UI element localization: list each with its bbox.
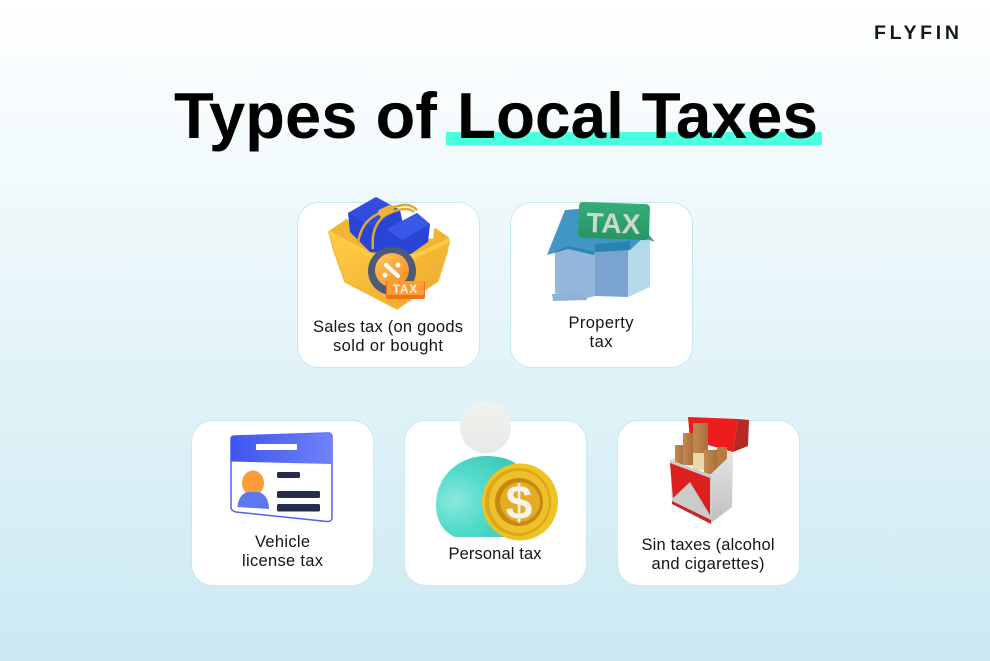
panel: personal tax (404, 402, 586, 586)
label: Personal tax (448, 545, 542, 563)
label (568, 314, 634, 351)
icon: shopping basket (329, 197, 449, 309)
icon: house with tax sign (547, 202, 655, 301)
icon: shopping basket: TAX (393, 284, 418, 296)
label (642, 536, 774, 573)
label (313, 318, 463, 355)
title text: Types of (174, 79, 437, 152)
title text: Local Taxes (457, 79, 818, 152)
icon: house with tax sign: TAX (586, 207, 641, 240)
panel: vehicle license tax (192, 420, 374, 586)
label: Property (568, 314, 634, 332)
label (242, 533, 324, 570)
label: Sin taxes (alcohol (642, 536, 774, 554)
label: sold or bought (333, 337, 443, 355)
label: and cigarettes) (652, 555, 764, 573)
logo: FLYFIN (874, 22, 959, 44)
panel: sales tax (298, 197, 480, 368)
panel: sin taxes (618, 417, 800, 586)
label: tax (590, 333, 613, 351)
label: license tax (242, 552, 324, 570)
title highlight (446, 132, 822, 145)
label: Vehicle (255, 533, 310, 551)
icon: person with dollar coin: $ (506, 477, 533, 530)
title text (174, 79, 818, 152)
icon: cigarette pack (670, 417, 749, 524)
icon: license card (231, 433, 332, 522)
panel: property tax (510, 202, 692, 368)
title (174, 79, 822, 152)
icon: person with dollar coin (436, 402, 558, 540)
label: Sales tax (on goods (313, 318, 463, 336)
